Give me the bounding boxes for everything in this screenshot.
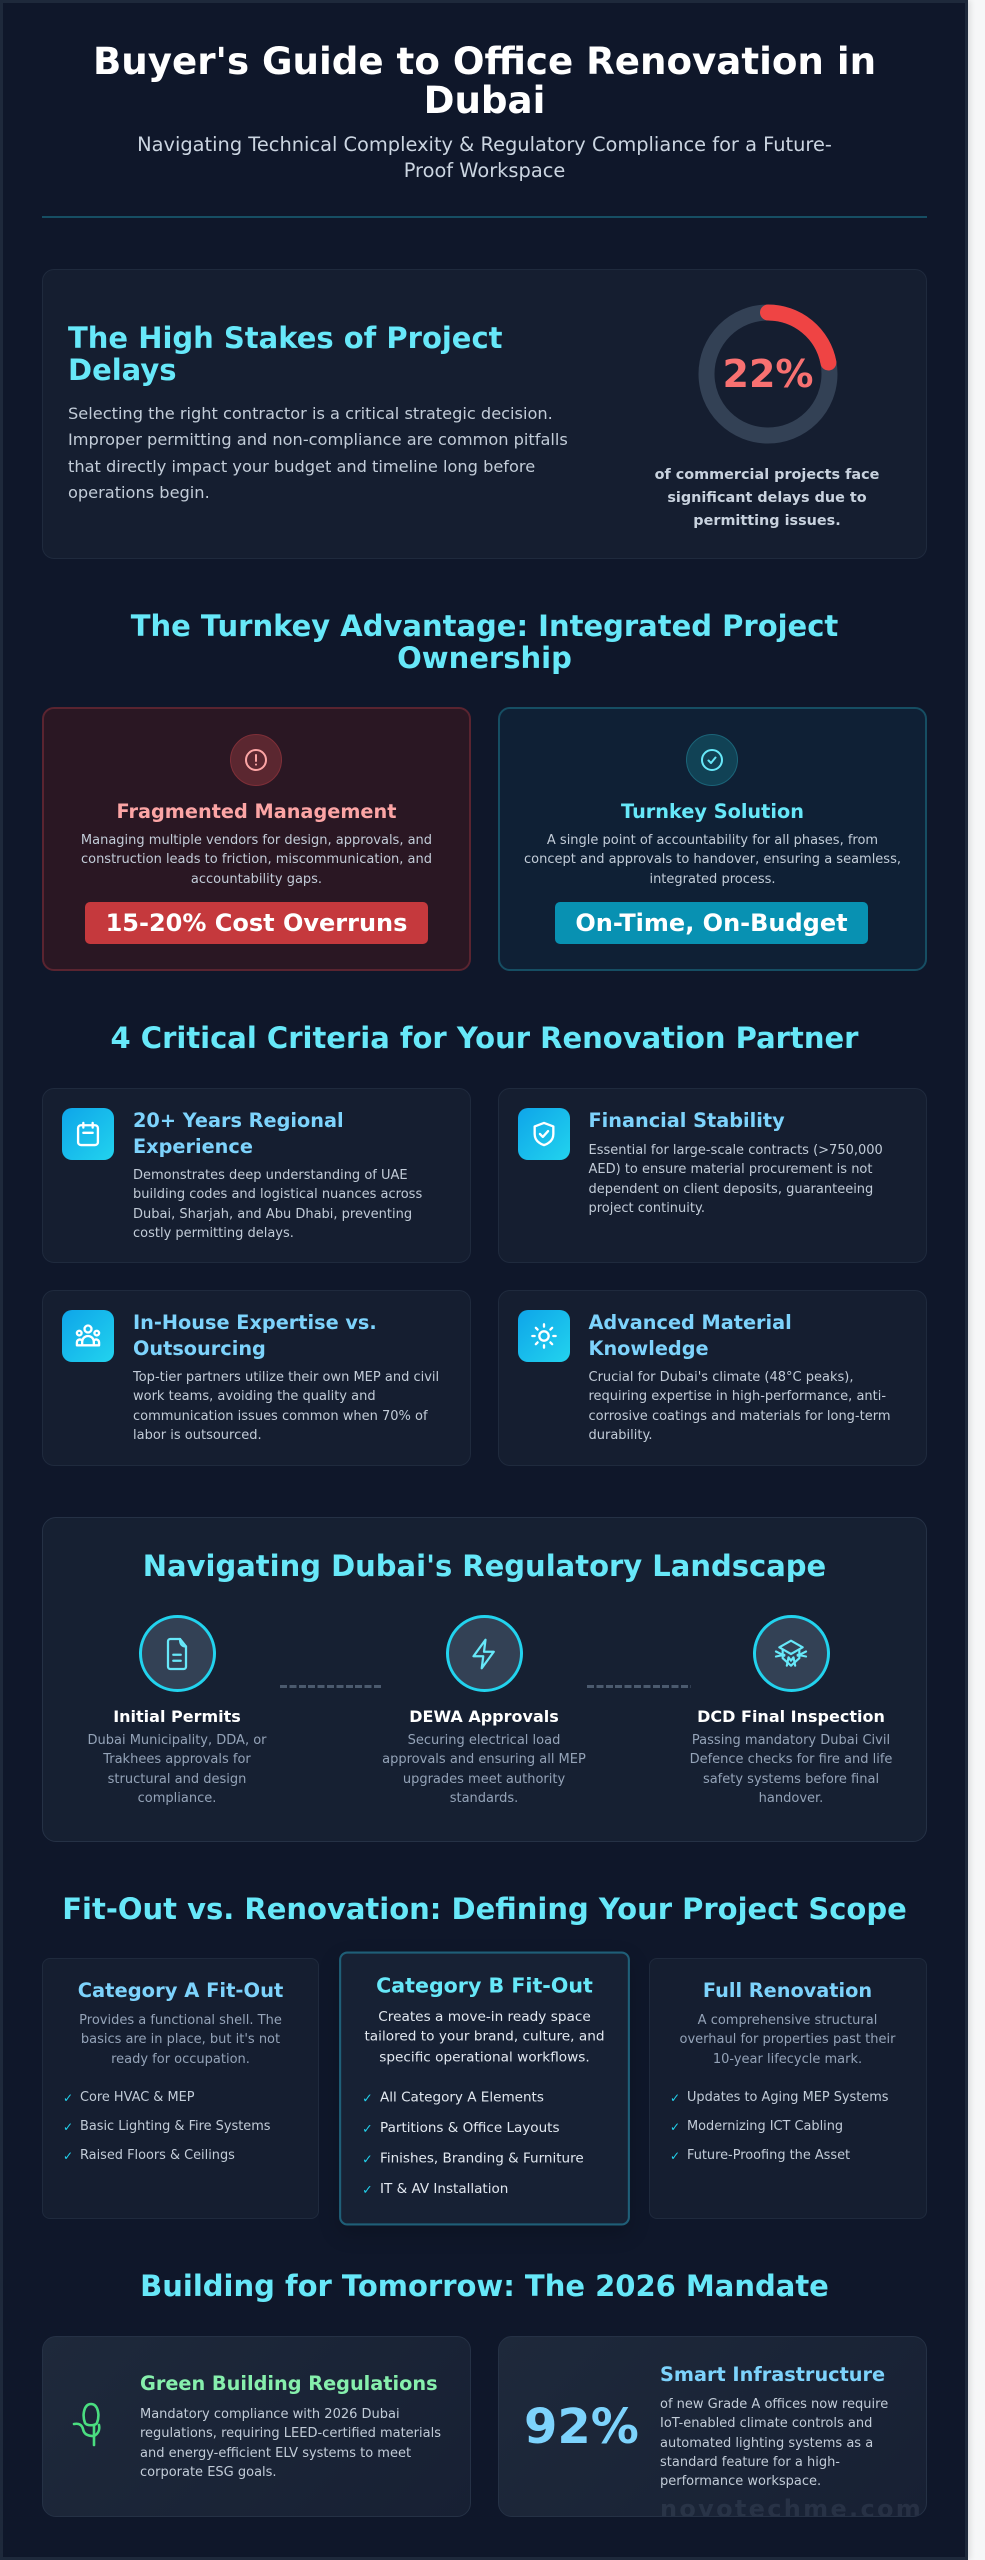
- text: dewa: approvals and ensuring all MEP: [382, 1752, 586, 1767]
- text: financial: [588, 1143, 883, 1216]
- list: category b: [362, 2090, 583, 2197]
- icon: sun: [518, 1310, 570, 1362]
- panel: financial stability: [498, 1088, 927, 1263]
- text: financial: dependent on client deposits, guaranteeing: [588, 1182, 873, 1197]
- text: smart infrastructure: [660, 2397, 888, 2489]
- text: expertise: Top-tier partners utilize their own MEP and civil: [133, 1370, 439, 1385]
- panel: high stakes of project delays: [42, 269, 927, 559]
- step: dcd final inspection: [690, 1615, 892, 1806]
- caption: donut: permitting issues.: [693, 513, 841, 529]
- panel: full renovation: [649, 1958, 926, 2219]
- text: experience: [133, 1168, 422, 1241]
- text: initial permits: Trakhees approvals for: [103, 1752, 251, 1767]
- text: financial: AED) to ensure material procurement is not: [588, 1162, 872, 1177]
- badge: cost overruns: 15-20% Cost Overruns: [106, 909, 407, 937]
- subtitle: [137, 133, 832, 182]
- list: category b: IT & AV Installation: [380, 2181, 508, 2197]
- heading: dewa: DEWA Approvals: [409, 1707, 559, 1726]
- text: experience: Demonstrates deep understanding of UAE: [133, 1168, 408, 1183]
- text: dewa: [382, 1733, 586, 1806]
- heading: financial: Financial Stability: [588, 1109, 785, 1132]
- panel: regional experience: [42, 1088, 471, 1263]
- text: dcd: handover.: [759, 1791, 823, 1806]
- text: expertise: work teams, avoiding the quality and: [133, 1389, 376, 1404]
- heading: experience: 20+ Years Regional: [133, 1109, 344, 1132]
- caption: donut: [655, 467, 879, 529]
- list: full renovation: Modernizing ICT Cabling: [687, 2119, 843, 2134]
- icon: shield: [518, 1108, 570, 1160]
- text: category a: basics are in place, but it's not: [81, 2032, 280, 2047]
- connector: step 2 to 3: [587, 1685, 691, 1688]
- text: high stakes body: Improper permitting and non-compliance are common pitfalls: [68, 430, 568, 449]
- step: dewa approvals: [382, 1615, 586, 1806]
- text: financial: project continuity.: [588, 1201, 705, 1216]
- badge: on time: On-Time, On-Budget: [575, 909, 848, 937]
- text: category a: ready for occupation.: [111, 2052, 250, 2067]
- text: material: requiring expertise in high-performance, anti-: [588, 1389, 886, 1404]
- list: category b: ✓: [362, 2182, 372, 2197]
- text: material: durability.: [588, 1428, 652, 1443]
- text: category b: Creates a move-in ready space: [378, 2009, 590, 2025]
- text: turnkey body: A single point of accountability for all phases, from: [547, 833, 878, 848]
- list: category b: ✓: [362, 2152, 372, 2167]
- text: high stakes body: Selecting the right contractor is a critical strategic decision.: [68, 404, 553, 423]
- heading: initial permits: Initial Permits: [113, 1707, 241, 1726]
- text: smart infrastructure: IoT-enabled climate controls and: [660, 2416, 872, 2431]
- text: high stakes body: [68, 404, 568, 502]
- icon: inspection badge: [752, 1615, 830, 1692]
- badge: cost overruns: [85, 902, 428, 944]
- text: turnkey body: integrated process.: [649, 872, 776, 887]
- step: initial permits: [87, 1615, 267, 1806]
- text: dewa: standards.: [450, 1791, 518, 1806]
- heading: material: Knowledge: [588, 1337, 709, 1360]
- text: full renovation: overhaul for properties past their: [680, 2032, 895, 2047]
- heading: turnkey advantage: The Turnkey Advantage: Integrated Project: [131, 608, 838, 642]
- text: dcd: Passing mandatory Dubai Civil: [692, 1733, 890, 1748]
- title: Buyer's Guide to Office Renovation in: [93, 39, 876, 83]
- list: category b: All Category A Elements: [380, 2090, 543, 2106]
- text: category a: Provides a functional shell. The: [79, 2013, 282, 2028]
- heading: expertise: [133, 1311, 377, 1360]
- subtitle: Proof Workspace: [404, 159, 565, 182]
- text: financial: Essential for large-scale contracts (>750,000: [588, 1143, 883, 1158]
- stat: 22%: 22%: [723, 352, 813, 396]
- heading: building for tomorrow: Building for Tomorrow: The 2026 Mandate: [140, 2269, 829, 2303]
- title: [93, 39, 876, 122]
- text: material: [588, 1370, 890, 1443]
- list: full renovation: [670, 2090, 888, 2163]
- heading: expertise: In-House Expertise vs.: [133, 1311, 377, 1334]
- text: category b: specific operational workflows.: [379, 2050, 589, 2065]
- text: green building: corporate ESG goals.: [140, 2465, 277, 2480]
- chart: 22% donut: [698, 304, 838, 444]
- list: category b: Partitions & Office Layouts: [380, 2121, 559, 2136]
- text: green building: and energy-efficient ELV systems to meet: [140, 2446, 411, 2461]
- text: high stakes body: that directly impact your budget and timeline long before: [68, 457, 535, 476]
- text: initial permits: Dubai Municipality, DDA, or: [87, 1733, 267, 1748]
- heading: smart infrastructure: Smart Infrastructure: [660, 2363, 885, 2386]
- subtitle: Navigating Technical Complexity & Regulatory Compliance for a Future-: [137, 133, 832, 156]
- icon: alert circle: [230, 734, 282, 786]
- connector: step 1 to 2: [280, 1685, 383, 1688]
- text: fragmented body: construction leads to friction, miscommunication, and: [81, 852, 432, 867]
- text: dcd: safety systems before final: [703, 1772, 879, 1787]
- text: smart infrastructure: automated lighting systems as a: [660, 2436, 873, 2451]
- list: category a: Raised Floors & Ceilings: [80, 2148, 235, 2163]
- heading: expertise: Outsourcing: [133, 1337, 266, 1360]
- panel: turnkey solution: [498, 707, 927, 971]
- heading: high stakes: The High Stakes of Project: [68, 321, 503, 355]
- heading: full renovation: Full Renovation: [703, 1979, 872, 2002]
- badge: on time: [555, 902, 868, 944]
- list: full renovation: Future-Proofing the Asset: [687, 2148, 850, 2163]
- list: category b: Finishes, Branding & Furniture: [380, 2151, 583, 2167]
- panel: category a fit-out: [42, 1958, 319, 2219]
- heading: dcd: DCD Final Inspection: [697, 1707, 885, 1726]
- text: initial permits: structural and design: [108, 1772, 246, 1787]
- list: category a: ✓: [63, 2091, 73, 2105]
- panel: fragmented management: [42, 707, 471, 971]
- heading: experience: Experience: [133, 1135, 253, 1158]
- text: turnkey body: concept and approvals to handover, ensuring a seamless,: [524, 852, 901, 867]
- text: fragmented body: Managing multiple vendors for design, approvals, and: [81, 833, 432, 848]
- text: green building: Mandatory compliance with 2026 Dubai: [140, 2407, 400, 2422]
- text: green building: [140, 2407, 441, 2480]
- text: fragmented body: [81, 833, 432, 887]
- text: expertise: labor is outsourced.: [133, 1428, 262, 1443]
- panel: category b fit-out: [339, 1951, 629, 2226]
- text: category a: [79, 2013, 282, 2067]
- heading: material: Advanced Material: [588, 1311, 792, 1334]
- list: category a: ✓: [63, 2149, 73, 2163]
- text: smart infrastructure: performance workspace.: [660, 2474, 821, 2489]
- title: Dubai: [424, 78, 545, 122]
- heading: fragmented: Fragmented Management: [117, 800, 396, 823]
- list: full renovation: ✓: [670, 2091, 680, 2105]
- heading: turnkey advantage: Ownership: [397, 640, 572, 674]
- caption: donut: significant delays due to: [667, 490, 867, 506]
- text: dewa: upgrades meet authority: [403, 1772, 565, 1787]
- list: category a: Core HVAC & MEP: [80, 2090, 194, 2105]
- panel: smart infrastructure: [498, 2336, 927, 2517]
- list: category b: ✓: [362, 2091, 372, 2106]
- text: dcd: Defence checks for fire and life: [690, 1752, 892, 1767]
- icon: file: [138, 1615, 216, 1692]
- text: experience: building codes and logistical nuances across: [133, 1187, 422, 1202]
- text: smart infrastructure: of new Grade A offices now require: [660, 2397, 888, 2412]
- icon: check circle: [686, 734, 738, 786]
- text: full renovation: 10-year lifecycle mark.: [713, 2052, 862, 2067]
- stat: 92%: 92%: [524, 2399, 639, 2455]
- text: experience: costly permitting delays.: [133, 1226, 294, 1241]
- text: turnkey body: [524, 833, 901, 887]
- heading: experience: [133, 1109, 344, 1158]
- icon: calendar: [62, 1108, 114, 1160]
- text: dcd: [690, 1733, 892, 1806]
- heading: regulatory: Navigating Dubai's Regulatory Landscape: [143, 1549, 826, 1583]
- text: category b: [364, 2009, 604, 2065]
- text: full renovation: [680, 2013, 896, 2067]
- heading: turnkey advantage: [130, 608, 838, 674]
- list: category a: [63, 2090, 270, 2163]
- text: experience: Dubai, Sharjah, and Abu Dhabi, preventing: [133, 1207, 412, 1222]
- text: fragmented body: accountability gaps.: [191, 872, 322, 887]
- heading: category a: Category A Fit-Out: [78, 1979, 283, 2002]
- list: category b: ✓: [362, 2122, 372, 2136]
- text: category b: tailored to your brand, culture, and: [364, 2029, 604, 2045]
- heading: 4 critical criteria: 4 Critical Criteria for Your Renovation Partner: [111, 1021, 858, 1055]
- text: high stakes body: operations begin.: [68, 483, 210, 502]
- text: expertise: communication issues common when 70% of: [133, 1409, 428, 1424]
- caption: donut: of commercial projects face: [655, 467, 879, 483]
- list: category a: ✓: [63, 2120, 73, 2134]
- heading: category b: Category B Fit-Out: [376, 1974, 592, 1998]
- text: green building: regulations, requiring LEED-certified materials: [140, 2426, 441, 2441]
- heading: high stakes: Delays: [68, 353, 177, 387]
- panel: in-house expertise: [42, 1290, 471, 1466]
- panel: green building regulations: [42, 2336, 471, 2517]
- icon: green sprout: [72, 2402, 101, 2446]
- list: full renovation: ✓: [670, 2120, 680, 2134]
- text: material: corrosive coatings and materials for long-term: [588, 1409, 890, 1424]
- list: category a: Basic Lighting & Fire Systems: [80, 2119, 270, 2134]
- heading: high stakes: [68, 321, 503, 387]
- text: dewa: Securing electrical load: [408, 1733, 560, 1748]
- icon: lightning: [446, 1615, 522, 1692]
- text: initial permits: [87, 1733, 267, 1806]
- text: smart infrastructure: standard feature for a high-: [660, 2455, 840, 2470]
- heading: fit-out vs renovation: Fit-Out vs. Renovation: Defining Your Project Scope: [62, 1892, 907, 1926]
- text: initial permits: compliance.: [138, 1791, 216, 1806]
- icon: team: [62, 1310, 114, 1362]
- heading: turnkey: Turnkey Solution: [621, 800, 804, 823]
- list: full renovation: Updates to Aging MEP Systems: [687, 2090, 888, 2105]
- heading: green building: Green Building Regulations: [140, 2372, 438, 2395]
- text: material: Crucial for Dubai's climate (48°C peaks),: [588, 1370, 853, 1385]
- panel: advanced material knowledge: [498, 1290, 927, 1466]
- list: full renovation: ✓: [670, 2149, 680, 2163]
- heading: material: [588, 1311, 792, 1360]
- panel: regulatory landscape: [42, 1517, 927, 1842]
- text: expertise: [132, 1370, 439, 1443]
- text: full renovation: A comprehensive structural: [698, 2013, 877, 2028]
